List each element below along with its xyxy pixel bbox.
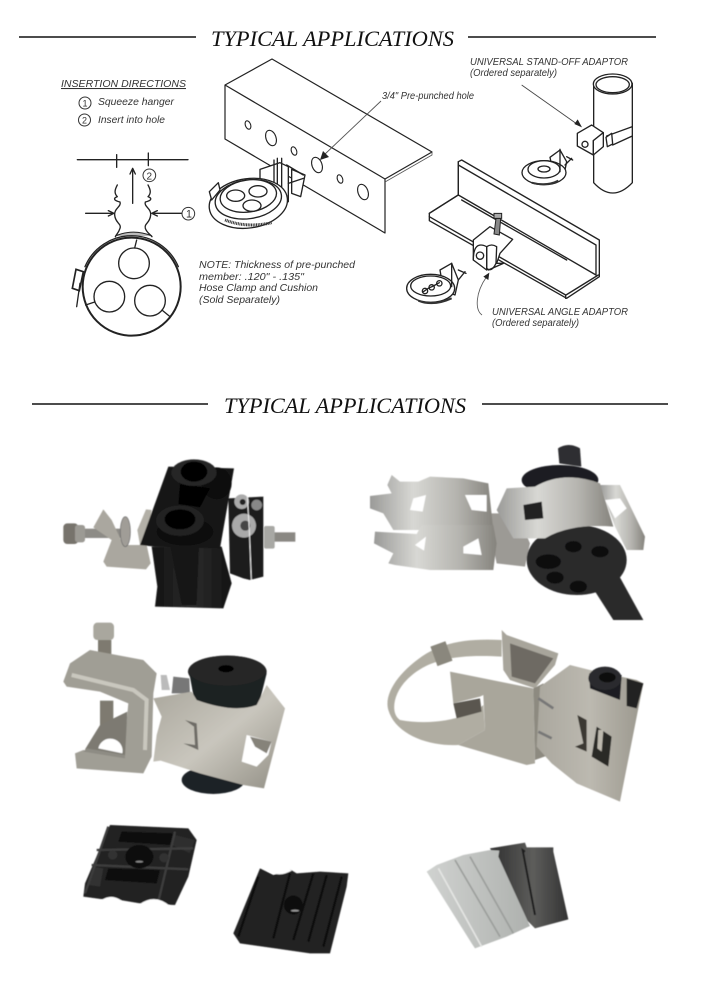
text: insertion directions: 1 bbox=[82, 98, 88, 108]
label: universal angle adaptor: UNIVERSAL ANGLE ADAPTOR bbox=[492, 306, 628, 318]
diagram: angle adaptor on angle iron bbox=[407, 160, 599, 315]
label: universal stand-off adaptor bbox=[470, 56, 628, 79]
text: insertion directions bbox=[61, 78, 186, 126]
text: thickness note: (Sold Separately) bbox=[199, 294, 280, 306]
diagram: stand-off adaptor on pole bbox=[522, 74, 632, 193]
photo: double-bore black hanger with beam clamp bbox=[63, 459, 295, 608]
label: universal angle adaptor bbox=[492, 306, 628, 329]
text: thickness note: NOTE: Thickness of pre-punched bbox=[199, 259, 356, 271]
photo: open metal spring clip with cushion and cable bbox=[370, 445, 645, 620]
diagram: hanger insertion cross section: 1 bbox=[186, 209, 192, 221]
icon: hose clamp hanger bbox=[206, 158, 305, 233]
diagram: punched angle bracket with hanger bbox=[206, 59, 474, 233]
text: insertion directions: 2 bbox=[82, 116, 87, 126]
text: insertion directions: Insert into hole bbox=[98, 114, 165, 126]
label: universal stand-off adaptor: (Ordered separately) bbox=[470, 67, 557, 79]
photo: grey and dark rubber inserts bbox=[427, 843, 568, 948]
photo: pole strap adaptor with hanger bbox=[387, 630, 643, 802]
text: thickness note: Hose Clamp and Cushion bbox=[199, 282, 318, 294]
text: insertion directions: INSERTION DIRECTIONS bbox=[61, 78, 186, 90]
icon: hanger for angle adaptor bbox=[407, 263, 466, 303]
photo: black cushion half underside bbox=[83, 825, 197, 906]
text: insertion directions: Squeeze hanger bbox=[98, 96, 174, 108]
photo: beam clamp with hanger bbox=[63, 623, 285, 794]
panel: product photos bbox=[63, 445, 645, 953]
heading: top typical applications: TYPICAL APPLICATIONS bbox=[211, 26, 454, 51]
panel: installation line drawings bbox=[61, 56, 632, 336]
diagram: hanger insertion cross section: 2 bbox=[147, 171, 153, 182]
icon: hanger for stand-off bbox=[522, 149, 573, 185]
label: 3/4 inch pre-punched hole: 3/4" Pre-punched hole bbox=[382, 90, 474, 102]
heading: second typical applications: TYPICAL APPLICATIONS bbox=[224, 393, 466, 418]
photo: black cushion half top bbox=[233, 868, 348, 953]
arrow: to pre-punched hole bbox=[320, 101, 381, 160]
text: thickness note bbox=[199, 259, 356, 306]
label: universal angle adaptor: (Ordered separately) bbox=[492, 317, 579, 329]
diagram: hanger insertion cross section bbox=[72, 153, 195, 336]
label: universal stand-off adaptor: UNIVERSAL STAND-OFF ADAPTOR bbox=[470, 56, 628, 68]
text: thickness note: member: .120" - .135" bbox=[199, 271, 305, 283]
